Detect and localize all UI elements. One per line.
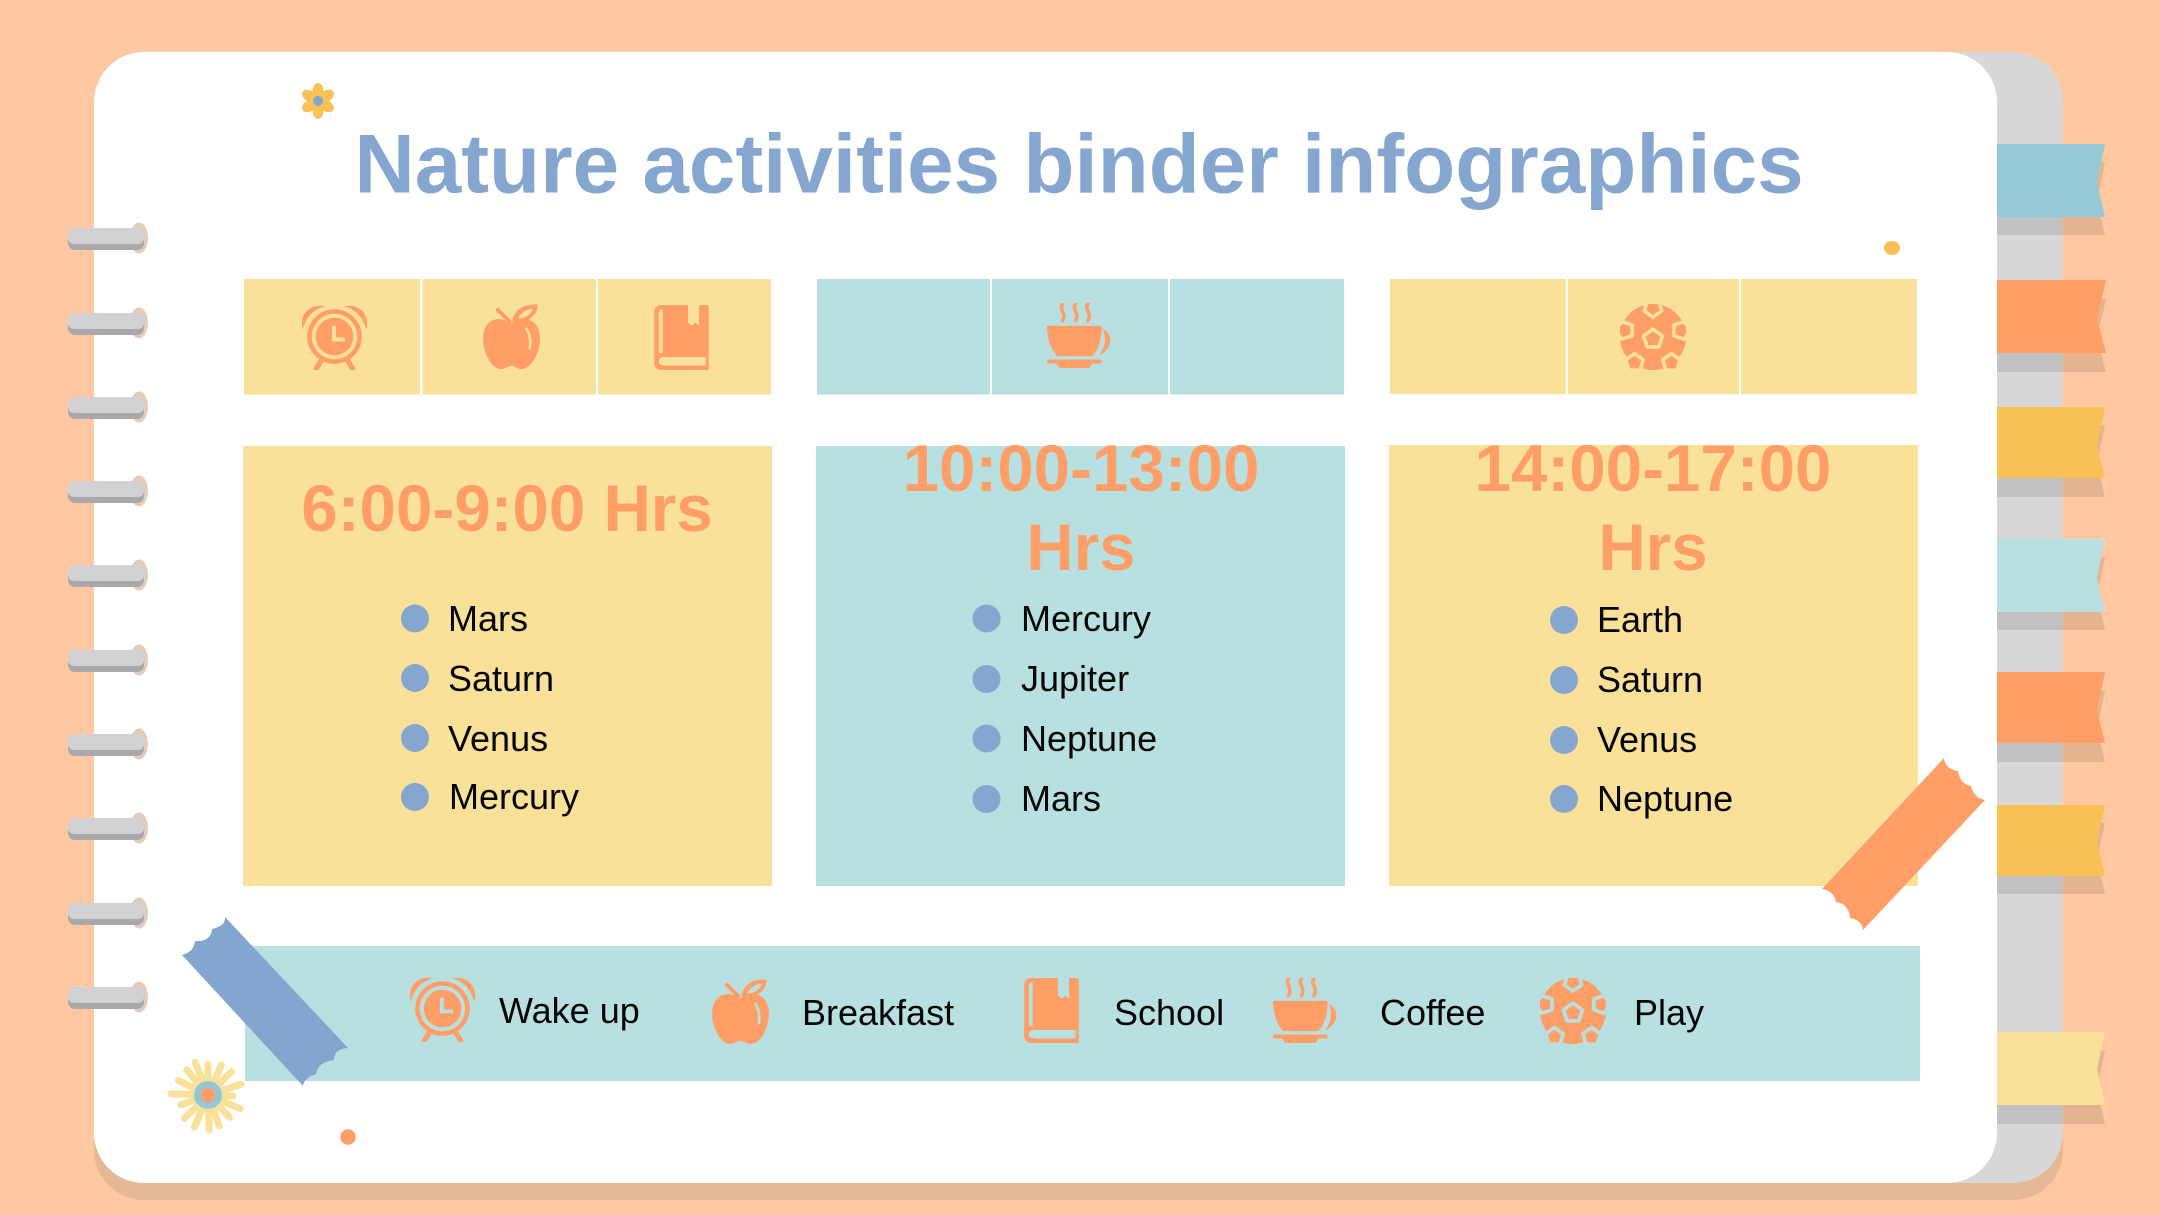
list: Venus [448,718,548,759]
legend: coffee: Coffee [1380,992,1485,1033]
icon: alarm clock [302,306,367,369]
tab 4 [1997,539,2105,630]
washi tape: blue [182,917,348,1086]
binder back cover [1800,52,2063,1183]
list: Venus [1597,719,1697,760]
list: Neptune [1597,778,1733,819]
legend: coffee [1273,979,1485,1043]
tab 2 [1997,280,2106,372]
list [401,598,579,817]
icon strip: midday [817,279,1344,394]
list: Mars [448,598,528,639]
icon: book [654,305,709,370]
legend: play [1535,975,1704,1049]
heading: 10:00-13:00 [903,432,1259,505]
tab 3 [1997,407,2105,497]
list: Mars [1021,778,1101,819]
list: Neptune [1021,718,1157,759]
heading: 14:00-17:00 [1475,432,1831,505]
list: Saturn [448,658,554,699]
panel: 14:00-17:00 [1389,432,1918,886]
decorative dot yellow [1884,241,1900,255]
legend: wake up [410,978,640,1041]
legend: school: School [1114,992,1224,1033]
list [972,598,1157,819]
icon: small flower [300,83,336,119]
title: Nature activities binder infographics [354,116,1804,210]
panel: 10:00-13:00: Hrs [1026,511,1136,584]
icon: coffee cup [1047,304,1110,368]
panel: 14:00-17:00: Hrs [1598,511,1708,584]
list: Earth [1597,599,1683,640]
tab 5 [1997,672,2105,762]
legend: play: Play [1634,992,1704,1033]
washi tape: orange [1822,758,1985,930]
legend: breakfast [712,979,954,1044]
list: Jupiter [1021,658,1129,699]
decorative dot orange [340,1129,356,1145]
heading: 6:00-9:00 Hrs [301,472,713,545]
icon: apple [483,304,540,369]
tab 6 [1997,805,2105,894]
legend: school [1024,978,1224,1043]
list: Mercury [449,776,579,817]
icon strip: morning [244,279,771,394]
list: Mercury [1021,598,1151,639]
icon strip: afternoon [1390,279,1917,394]
tab 7 [1997,1032,2105,1124]
legend banner [245,946,1920,1081]
tab 1 [1997,144,2105,235]
list: Saturn [1597,659,1703,700]
icon: soccer ball [1615,301,1691,375]
legend: breakfast: Breakfast [802,992,954,1033]
panel: 6:00-9:00 [243,446,772,886]
list [1550,599,1733,819]
icon: sun flower [171,1062,241,1130]
legend: wake up: Wake up [499,990,640,1031]
panel: 10:00-13:00 [816,432,1345,886]
index tabs [1997,144,2106,1124]
spiral rings [68,222,148,1012]
